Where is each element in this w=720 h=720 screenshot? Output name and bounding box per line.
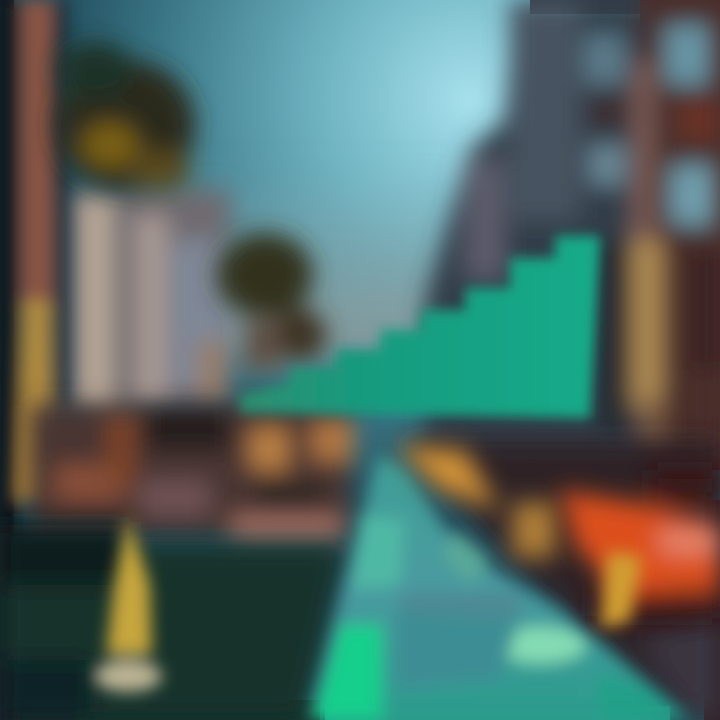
green bar chart	[240, 236, 600, 418]
yellow lamp post right	[600, 552, 642, 628]
orange lights along street	[395, 445, 556, 558]
dark green ground	[0, 525, 345, 720]
street level buildings and lights	[30, 405, 354, 545]
buildings: right side	[425, 0, 720, 470]
buildings: left side pale blocks	[60, 190, 230, 415]
red orange car	[560, 470, 720, 617]
left columns and dark edge	[0, 0, 68, 720]
yellow lamp post left	[94, 515, 162, 692]
palm trees	[55, 42, 326, 370]
water reflection	[308, 455, 690, 720]
right street base	[400, 440, 720, 720]
